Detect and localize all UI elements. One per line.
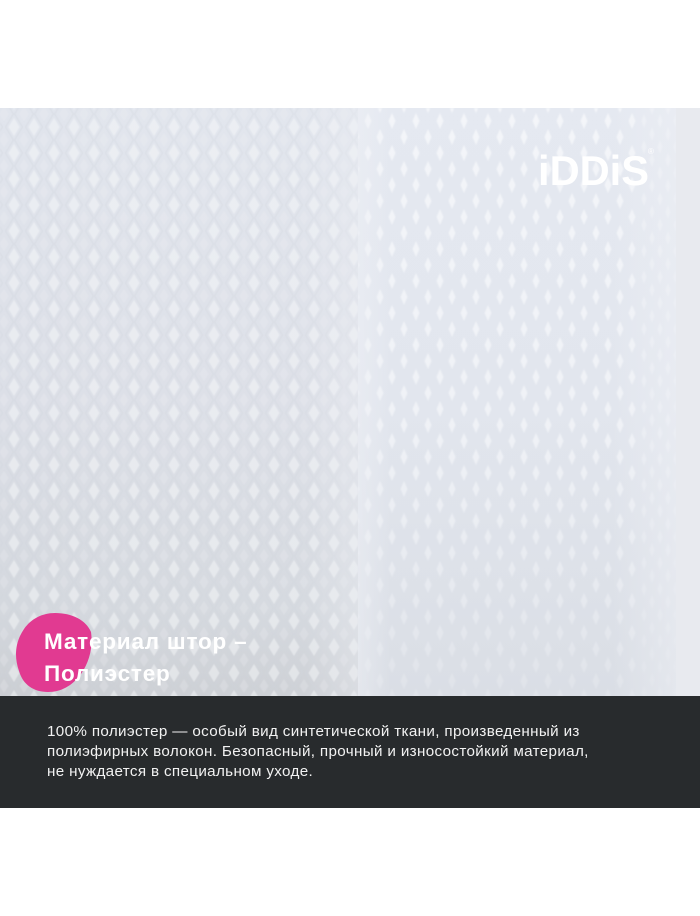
icon: pink blob behind heading bbox=[16, 613, 92, 692]
heading: material bbox=[44, 628, 247, 686]
heading: material: Материал штор – bbox=[44, 628, 247, 654]
text block: description bbox=[47, 722, 589, 780]
photo: polyester curtain fabric with diamond weave bbox=[0, 108, 700, 696]
text block: description: 100% полиэстер — особый вид синтетической ткани, произведенный из bbox=[47, 722, 580, 740]
text block: description: полиэфирных волокон. Безопасный, прочный и износостойкий материал, bbox=[47, 743, 589, 760]
logo: IDDIS: ® bbox=[648, 147, 654, 156]
text block: description: не нуждается в специальном уходе. bbox=[47, 763, 313, 780]
heading: material: Полиэстер bbox=[44, 661, 171, 686]
panel: dark description band bbox=[0, 696, 700, 808]
